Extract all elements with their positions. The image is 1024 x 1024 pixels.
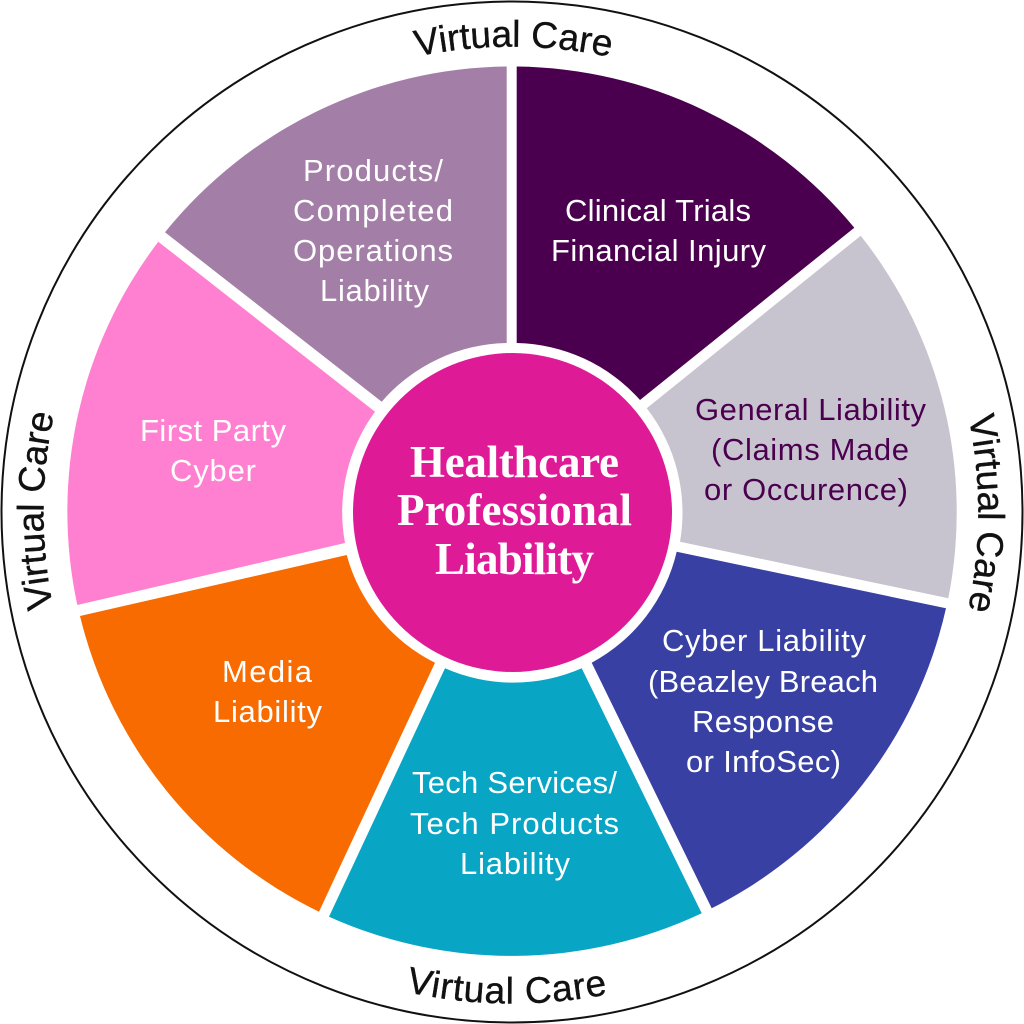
segment: Media Liability: Liability [213, 694, 322, 729]
segment: Cyber Liability: Cyber Liability [662, 623, 866, 658]
center hub: Healthcare Professional Liability: Healthcare [410, 437, 619, 487]
segment: Products / Completed Operations Liability: Products/ [303, 153, 443, 188]
segment: Tech Services / Tech Products Liability: Tech Products [410, 806, 619, 841]
segment: Products / Completed Operations Liability: Completed [293, 193, 453, 228]
center hub: Healthcare Professional Liability: Liability [435, 534, 594, 584]
center hub: Healthcare Professional Liability [353, 353, 672, 672]
segment: General Liability: General Liability [695, 392, 926, 427]
label: Virtual Care top: Virtual Care [412, 20, 611, 56]
segment: Products / Completed Operations Liability: Liability [320, 273, 430, 308]
segment: Tech Services / Tech Products Liability [329, 668, 702, 956]
segment: Cyber Liability: (Beazley Breach [648, 664, 878, 699]
segment: Clinical Trials Financial Injury [517, 66, 854, 400]
label: Virtual Care bottom: Virtual Care [410, 966, 606, 1004]
segment: Media Liability [80, 555, 435, 912]
segment: Media Liability: Media [222, 654, 313, 689]
segment: First Party Cyber: First Party [140, 413, 286, 448]
segment: Clinical Trials Financial Injury: Clinical Trials [565, 193, 751, 228]
segment: Clinical Trials Financial Injury: Financial Injury [551, 233, 766, 268]
segment: Tech Services / Tech Products Liability: Liability [460, 846, 570, 881]
label: Virtual Care left: Virtual Care [16, 413, 53, 612]
segment: Cyber Liability: Response [692, 704, 834, 739]
segment: First Party Cyber [67, 242, 375, 605]
segment: Products / Completed Operations Liability: Operations [293, 233, 453, 268]
segment: Cyber Liability [592, 552, 946, 908]
segment: General Liability: or Occurence) [704, 472, 908, 507]
segment: Products / Completed Operations Liability [165, 66, 507, 402]
segment: Cyber Liability: or InfoSec) [686, 744, 841, 779]
segment: General Liability [647, 236, 957, 598]
label: Virtual Care right: Virtual Care [969, 412, 1006, 611]
segment: Tech Services / Tech Products Liability: Tech Services/ [412, 765, 617, 800]
center hub: Healthcare Professional Liability: Professional [397, 485, 632, 535]
segment: First Party Cyber: Cyber [170, 453, 256, 488]
segment: General Liability: (Claims Made [711, 432, 909, 467]
